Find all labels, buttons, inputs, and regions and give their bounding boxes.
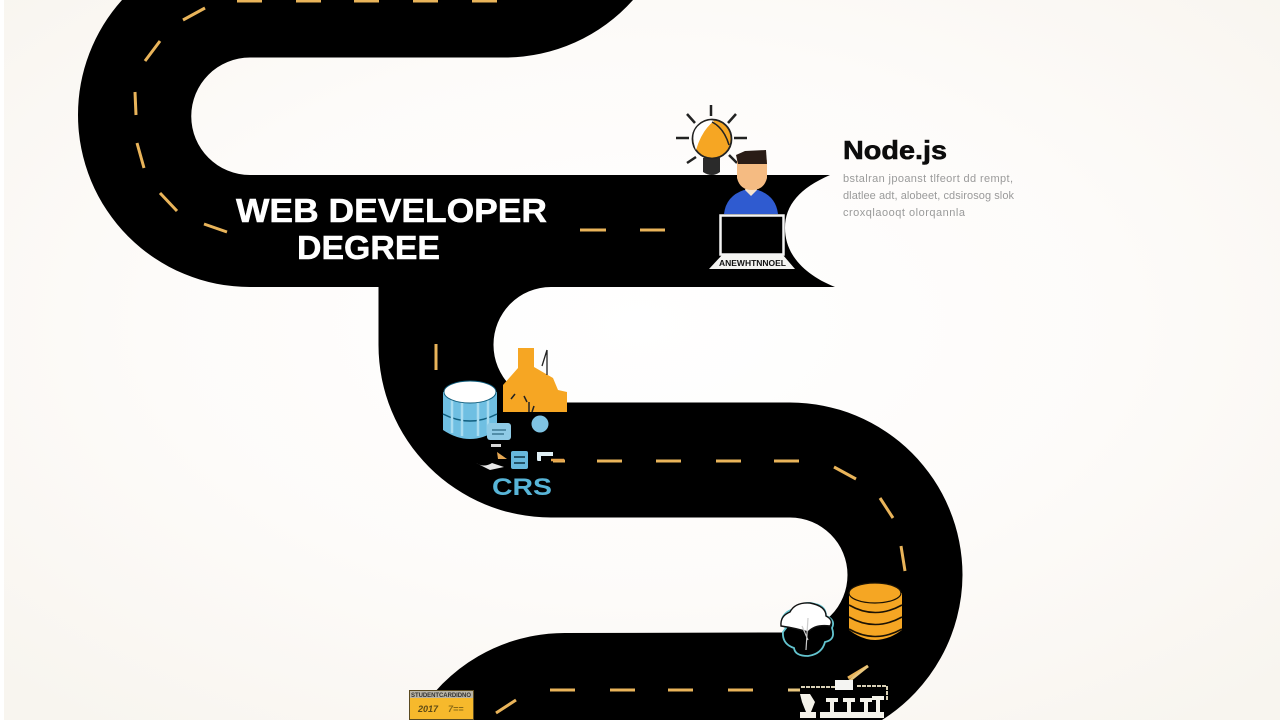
icon: orange building: [503, 348, 567, 412]
icon: yellow certificate card: 7==: [448, 704, 464, 714]
icon: yellow certificate card: [410, 690, 474, 720]
road: [78, 0, 962, 720]
icon: small tech cluster with CSS label: CRS: [492, 474, 552, 501]
icon: database: [443, 381, 497, 439]
icon: developer with laptop: [709, 150, 795, 269]
icon: network diagram: [788, 666, 887, 718]
icon: yellow certificate card: 2017: [417, 704, 439, 714]
description text: [843, 173, 1014, 219]
title: WEB DEVELOPER: [236, 192, 547, 229]
title: DEGREE: [297, 229, 440, 266]
icon: orange coin stack: [849, 583, 902, 640]
heading: Node.js: Node.js: [843, 135, 947, 165]
icon: developer with laptop: ANEWHTNNOEL: [719, 259, 786, 268]
icon: light bulb: [676, 105, 747, 175]
description text: croxqlaooqt olorqannla: [843, 207, 966, 219]
icon: small tech cluster with CSS label: [476, 416, 564, 501]
icon: yellow certificate card: STUDENTCARDIDNO: [411, 693, 471, 699]
road centre dashes: [135, 1, 905, 713]
description text: dlatlee adt, alobeet, cdsirosog slok: [843, 190, 1014, 202]
icon: cloud: [781, 603, 833, 656]
title: [236, 192, 547, 266]
description text: bstalran jpoanst tlfeort dd rempt,: [843, 173, 1013, 185]
